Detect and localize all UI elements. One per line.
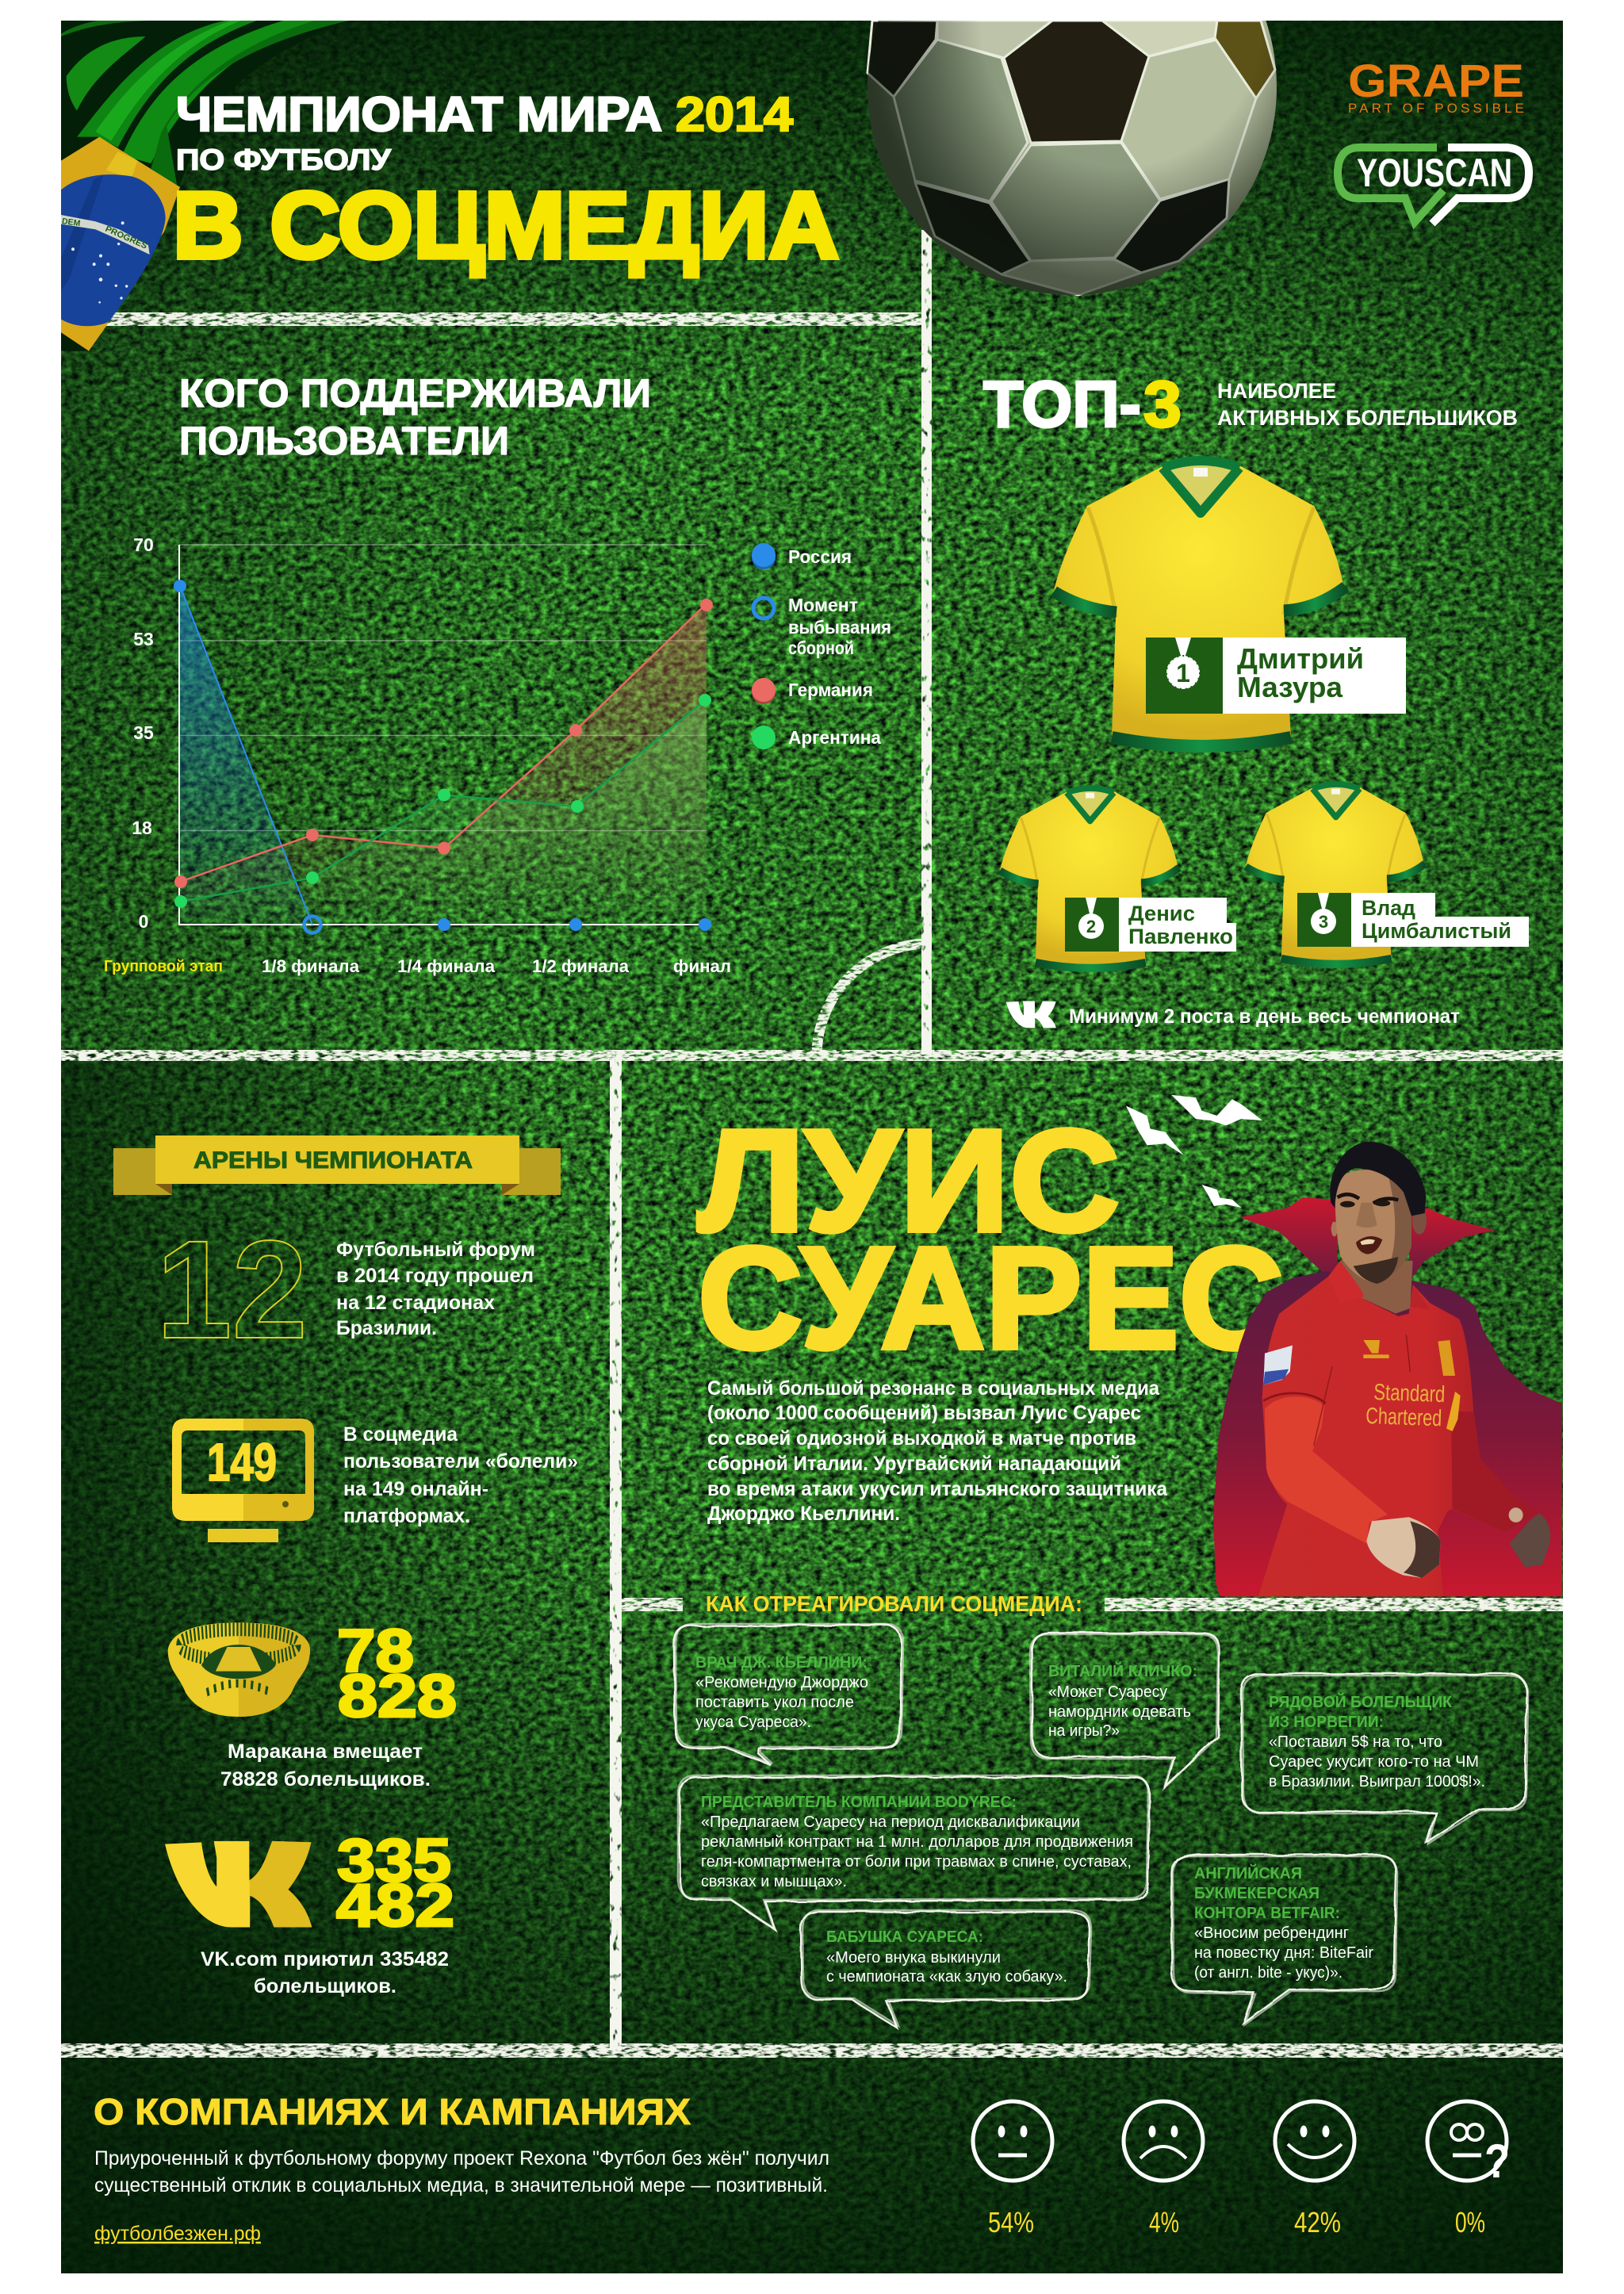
icon: monitor: 149 xyxy=(207,1433,277,1492)
stat: 149 platforms: В соцмедиа xyxy=(343,1423,458,1446)
stat: 149 platforms: пользователи «болели» xyxy=(343,1450,578,1473)
y axis labels: 18 xyxy=(132,818,152,838)
banner: arenas: АРЕНЫ ЧЕМПИОНАТА xyxy=(193,1147,473,1174)
speech bubble: grandmother: БАБУШКА СУАРЕСА: xyxy=(826,1928,983,1946)
section: companies and campaigns: футболбезжен.рф xyxy=(94,2223,261,2245)
logo: Grape: GRAPE xyxy=(1348,56,1524,107)
stat: 12 stadiums: 12 xyxy=(156,1212,308,1368)
stat: 12 stadiums: Бразилии. xyxy=(336,1317,437,1339)
heading: top-3 xyxy=(983,367,1518,441)
heading: top-3: ТОП- xyxy=(983,367,1141,441)
jersey badges xyxy=(1263,1340,1461,1431)
speech bubble: Betfair: КОНТОРА BETFAIR: xyxy=(1194,1905,1340,1922)
icon: VK logo xyxy=(165,1841,312,1927)
title xyxy=(173,87,839,278)
stat: VK xyxy=(165,1827,454,1997)
speech bubble: doctor: укуса Суареса». xyxy=(695,1714,811,1731)
icon: happy face xyxy=(1275,2101,1354,2181)
y axis labels xyxy=(132,534,154,932)
heading: who users supported: ПОЛЬЗОВАТЕЛИ xyxy=(179,419,509,463)
shirt: first place xyxy=(1053,459,1406,746)
soccer ball xyxy=(868,0,1277,295)
y axis labels: 35 xyxy=(133,722,154,743)
speech bubble: grandmother xyxy=(801,1910,1091,2028)
medal 1 xyxy=(1166,638,1200,689)
speech bubble: grandmother: «Моего внука выкинули xyxy=(826,1949,1001,1967)
stat: VK: VK.com приютил 335482 xyxy=(201,1948,449,1970)
cape xyxy=(1213,1197,1562,1596)
stat: 149 platforms: на 149 онлайн- xyxy=(343,1478,488,1500)
paragraph: Suarez story: Джорджо Кьеллини. xyxy=(707,1503,900,1525)
icon: unsure face xyxy=(1427,2101,1510,2188)
title: ПО ФУТБОЛУ xyxy=(176,144,392,176)
sentiment percentages: 42% xyxy=(1294,2206,1341,2238)
x axis labels: 1/8 финала xyxy=(262,956,360,976)
title: 2014 xyxy=(676,87,793,141)
y axis labels: 0 xyxy=(139,911,148,932)
speech bubble: Betfair: на повестку дня: BiteFair xyxy=(1194,1944,1373,1962)
speech bubble: grandmother: с чемпионата «как злую собаку». xyxy=(826,1968,1067,1986)
Brazilian flag drape: DEM xyxy=(61,216,81,228)
chart legend: выбывания xyxy=(788,617,891,638)
speech bubble: Klitschko: намордник одевать xyxy=(1048,1703,1191,1721)
speech bubble: doctor: «Рекомендую Джорджо xyxy=(695,1674,868,1691)
paragraph: Suarez story: (около 1000 сообщений) вызвал Луис Суарес xyxy=(707,1402,1141,1424)
stat: 12 stadiums: на 12 стадионах xyxy=(336,1292,495,1314)
title: В СОЦМЕДИА xyxy=(173,173,839,278)
stat: VK: 482 xyxy=(336,1872,454,1940)
speech bubble: doctor: ВРАЧ ДЖ. КЬЕЛЛИНИ: xyxy=(695,1654,868,1672)
icon: monitor xyxy=(172,1419,314,1542)
stat: 12 stadiums xyxy=(156,1212,535,1368)
icon: sad face xyxy=(1124,2101,1203,2181)
heading: Luis Suarez: ЛУИС xyxy=(698,1099,1120,1262)
heading: Luis Suarez xyxy=(698,1099,1284,1379)
medal 2: 2 xyxy=(1086,917,1096,936)
section: companies and campaigns xyxy=(94,2091,829,2245)
stat: Maracana: Маракана вмещает xyxy=(228,1741,423,1763)
speech bubble: Bodyrec: геля-компартмента от боли при травмах в спине, суставах, xyxy=(701,1853,1132,1871)
x axis labels: Групповой этап xyxy=(104,958,223,975)
shirt: second place: Денис xyxy=(1128,902,1195,925)
paragraph: Suarez story: со своей одиозной выходкой в матче против xyxy=(707,1427,1136,1450)
Germany points xyxy=(174,599,713,888)
VK note xyxy=(1006,1001,1460,1028)
sentiment percentages xyxy=(988,2206,1485,2238)
icon: unsure face: ? xyxy=(1484,2135,1510,2188)
medal 2 xyxy=(1078,898,1104,939)
heading: who users supported: КОГО ПОДДЕРЖИВАЛИ xyxy=(179,371,651,416)
chart legend: Германия xyxy=(788,680,873,700)
stat: Maracana: 828 xyxy=(338,1663,457,1730)
speech bubble: Klitschko xyxy=(1030,1633,1220,1788)
speech bubble: Betfair: АНГЛИЙСКАЯ xyxy=(1194,1863,1302,1882)
section: companies and campaigns: Приуроченный к футбольному форуму проект Rexona "Футбол без жён" получил xyxy=(94,2147,829,2170)
title: ЧЕМПИОНАТ МИРА xyxy=(176,87,662,141)
stat: 12 stadiums: Футбольный форум xyxy=(336,1239,535,1261)
logo: YouScan: YOUSCAN xyxy=(1357,151,1512,195)
speech bubble: Betfair: «Вносим ребрендинг xyxy=(1194,1924,1349,1942)
speech bubble: Betfair: (от англ. bite - укус)». xyxy=(1194,1964,1342,1982)
chart legend: сборной xyxy=(788,638,854,658)
illustration: Suarez in vampire cape: Chartered xyxy=(1365,1404,1442,1431)
speech bubble: Bodyrec: связках и мышцах». xyxy=(701,1873,847,1890)
speech bubble: doctor xyxy=(674,1624,903,1765)
x axis labels: финал xyxy=(673,956,731,976)
icon: neutral face xyxy=(973,2101,1052,2181)
speech bubble: doctor: поставить укол после xyxy=(695,1694,854,1711)
y axis labels: 53 xyxy=(133,629,154,649)
shirt: second place: Павленко xyxy=(1128,925,1233,948)
heading: top-3: 3 xyxy=(1143,367,1182,441)
stat: 149 platforms: платформах. xyxy=(343,1505,470,1527)
speech bubble: Norwegian fan xyxy=(1241,1674,1528,1844)
paragraph: Suarez story: во время атаки укусил итальянского защитника xyxy=(707,1478,1168,1500)
stat: Maracana: 78 xyxy=(337,1618,414,1685)
stat: Maracana xyxy=(168,1618,457,1790)
head xyxy=(1328,1142,1430,1314)
chart legend: Россия xyxy=(788,546,852,567)
speech bubble: Norwegian fan: ИЗ НОРВЕГИИ: xyxy=(1269,1714,1384,1731)
heading: top-3: НАИБОЛЕЕ xyxy=(1217,379,1336,403)
speech bubble: Betfair: БУКМЕКЕРСКАЯ xyxy=(1194,1885,1320,1902)
speech bubble: Klitschko: на игры?» xyxy=(1048,1722,1120,1740)
jersey xyxy=(1258,1277,1537,1596)
x axis labels: 1/2 финала xyxy=(532,956,630,976)
heading: how social media reacted: КАК ОТРЕАГИРОВАЛИ СОЦМЕДИА: xyxy=(706,1591,1082,1616)
heading: who users supported xyxy=(179,371,651,463)
stat: 149 platforms xyxy=(172,1419,578,1542)
speech bubble: Betfair xyxy=(1171,1855,1397,2024)
shirt: first place: Дмитрий xyxy=(1237,642,1364,675)
sentiment percentages: 54% xyxy=(988,2206,1034,2238)
Brazilian flag drape xyxy=(61,21,349,351)
heading: Luis Suarez: СУАРЕС xyxy=(698,1216,1284,1379)
illustration: Suarez in vampire cape xyxy=(1213,1142,1562,1596)
sentiment percentages: 4% xyxy=(1149,2206,1179,2238)
logo: YouScan xyxy=(1338,147,1529,224)
shirt: second place xyxy=(999,787,1236,968)
x axis labels xyxy=(104,956,731,976)
stat: Maracana: 78828 болельщиков. xyxy=(220,1768,431,1790)
speech bubble: Bodyrec xyxy=(678,1775,1150,1930)
sponsor lettering: Standard xyxy=(1373,1380,1446,1407)
elimination marker xyxy=(304,917,320,933)
speech bubble: Norwegian fan: РЯДОВОЙ БОЛЕЛЬЩИК xyxy=(1269,1692,1453,1711)
stat: VK: болельщиков. xyxy=(254,1975,396,1997)
paragraph: Suarez story: Самый большой резонанс в социальных медиа xyxy=(707,1377,1160,1400)
Brazilian flag drape: PROGRES xyxy=(104,224,148,251)
heading: top-3: АКТИВНЫХ БОЛЕЛЬШИКОВ xyxy=(1217,406,1518,430)
chart legend: Аргентина xyxy=(788,727,881,748)
section: companies and campaigns: существенный отклик в социальных медиа, в значительной мере — позитивный. xyxy=(94,2174,828,2196)
sentiment percentages: 0% xyxy=(1455,2206,1485,2238)
shirt: first place: Мазура xyxy=(1237,671,1343,703)
line chart xyxy=(104,534,731,976)
speech bubble: Klitschko: «Может Суаресу xyxy=(1048,1683,1167,1701)
icon: bats xyxy=(1126,1095,1262,1208)
hands xyxy=(1366,1507,1550,1578)
speech bubble: Bodyrec: ПРЕДСТАВИТЕЛЬ КОМПАНИИ BODYREC: xyxy=(701,1794,1017,1811)
shirt: third place: Цимбалистый xyxy=(1362,919,1511,943)
speech bubble: Klitschko: ВИТАЛИЙ КЛИЧКО: xyxy=(1048,1661,1197,1680)
VK note: Минимум 2 поста в день весь чемпионат xyxy=(1069,1005,1460,1028)
logo: Grape: PART OF POSSIBLE xyxy=(1348,101,1524,116)
chart legend xyxy=(752,543,891,749)
speech bubble: Norwegian fan: «Поставил 5$ на то, что xyxy=(1269,1733,1442,1751)
shirt: third place xyxy=(1245,783,1529,964)
speech bubble: Bodyrec: «Предлагаем Суаресу на период дисквалификации xyxy=(701,1813,1080,1831)
chart legend: Момент xyxy=(788,595,858,615)
Argentina points xyxy=(174,694,711,908)
icon: stadium xyxy=(168,1622,310,1717)
medal 3: 3 xyxy=(1319,912,1328,932)
x axis labels: 1/4 финала xyxy=(397,956,496,976)
paragraph: Suarez story: сборной Италии. Уругвайский нападающий xyxy=(707,1453,1121,1475)
medal 3 xyxy=(1311,893,1336,934)
banner: arenas xyxy=(113,1136,561,1195)
stat: VK: 335 xyxy=(337,1827,451,1894)
stat: 12 stadiums: в 2014 году прошел xyxy=(336,1265,534,1287)
Russia points xyxy=(174,580,711,931)
speech bubble: Bodyrec: рекламный контракт на 1 млн. долларов для продвижения xyxy=(701,1833,1133,1851)
section: companies and campaigns: О КОМПАНИЯХ И КАМПАНИЯХ xyxy=(94,2091,691,2132)
shirt: third place: Влад xyxy=(1362,896,1415,920)
medal 1: 1 xyxy=(1176,659,1190,687)
speech bubble: Norwegian fan: в Бразилии. Выиграл 1000$!». xyxy=(1269,1773,1485,1790)
y axis labels: 70 xyxy=(133,534,154,555)
paragraph: Suarez story xyxy=(707,1377,1168,1525)
speech bubble: Norwegian fan: Суарес укусит кого-то на ЧМ xyxy=(1269,1753,1479,1771)
